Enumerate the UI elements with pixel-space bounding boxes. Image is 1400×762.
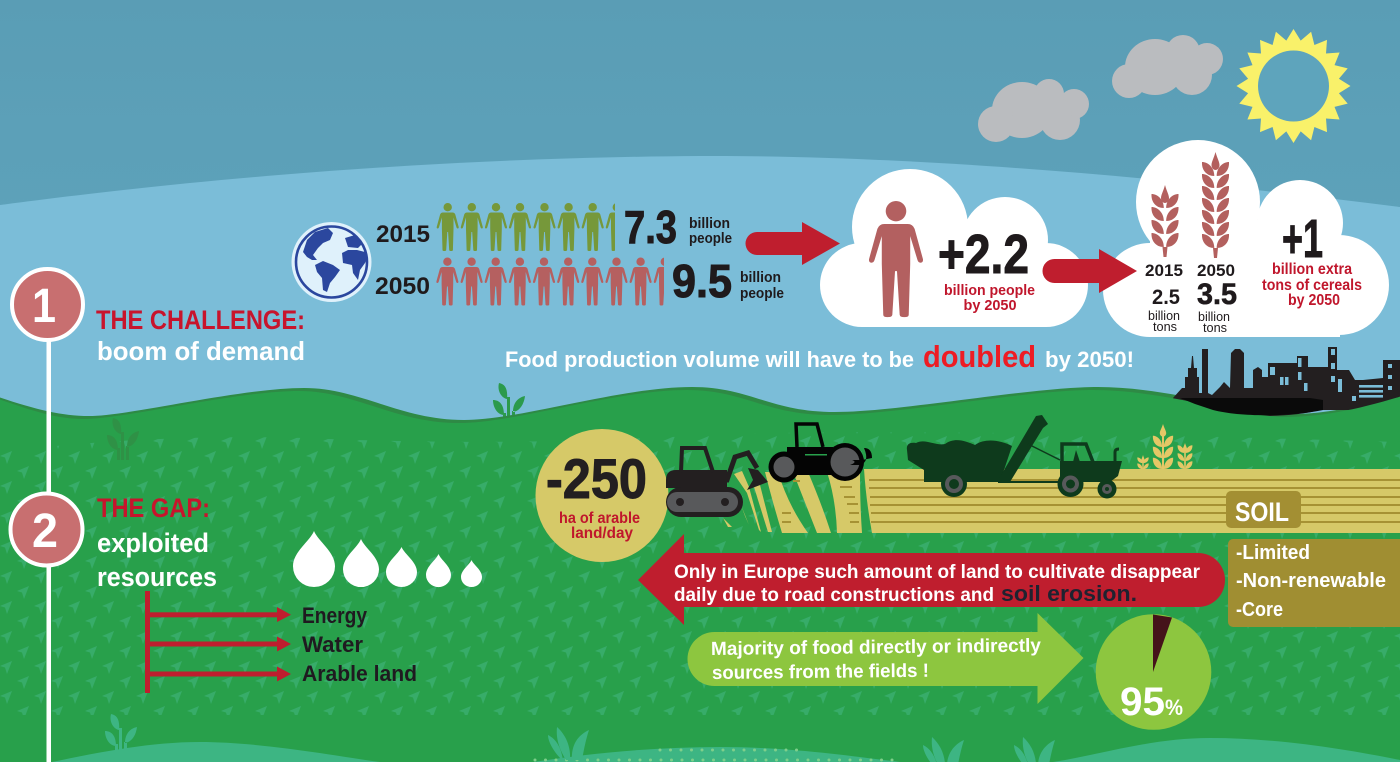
heading: the gap: resources [97,562,217,592]
arrow pattern on field [0,432,1400,715]
stat +1 billion extra tons: tons of cereals [1262,277,1362,294]
icon: large person [869,201,923,317]
icon: wheat 2050 [1202,152,1229,258]
cloud: grey left [978,79,1089,142]
icon: grass 3 [1014,737,1055,762]
icon: water drops [293,531,482,587]
icon: faded sprout [107,418,139,460]
callout: green arrow fields: sources from the fields ! [712,661,929,684]
people row 2015 [437,203,628,251]
pie chart 95% [1096,614,1211,730]
timeline line [46,340,51,762]
arrow: cloud to cereals [1042,249,1137,293]
people row 2050 [436,258,676,306]
resource labels: Energy [302,603,368,628]
cereals 2050 text [1197,261,1237,335]
stat 9.5 billion people [672,255,784,307]
stat +2.2 billion people: billion people [944,282,1035,299]
cereals 2015 text: 2015 [1145,261,1183,280]
stat +2.2 billion people [938,223,1035,314]
field row dashes [782,480,859,523]
cereals 2015 text [1145,261,1183,334]
callout: green arrow fields: Majority of food directly or indirectly [711,636,1041,660]
callout: red arrow europe: daily due to road constructions and [674,584,994,606]
stat +1 billion extra tons: by 2050 [1288,292,1340,309]
icon: grass 2 [923,737,964,762]
cloud: cereals [1103,140,1389,337]
stat 7.3 billion people: billion [689,216,730,232]
arrow: people to cloud [746,222,840,265]
stat +2.2 billion people: +2.2 [938,223,1029,285]
heading: the challenge [96,305,305,366]
city skyline [1173,347,1400,416]
green hill edge [0,385,1400,762]
badge: -250 ha: -250 [546,447,647,510]
label: soil: SOIL [1235,497,1289,527]
icon: sun [1236,29,1350,143]
icon: bottom sprout [105,714,137,756]
callout: red arrow europe [638,534,1225,625]
step 2 badge: 2 [32,505,58,558]
callout: green arrow fields [688,613,1084,704]
icon: sprout on horizon [493,383,525,425]
black ground under city [1180,398,1323,415]
panel: soil properties: -Non-renewable [1236,570,1386,592]
heading: the challenge: boom of demand [97,336,305,366]
heading: the challenge: THE CHALLENGE: [96,305,305,335]
step 2 badge [10,494,82,566]
icon: road roller [768,424,872,482]
dots on bottom hills [535,750,900,760]
cereals 2050 text: tons [1203,320,1227,335]
cereals 2050 text: 2050 [1197,261,1235,280]
cereals 2015 text: tons [1153,319,1177,334]
stat +2.2 billion people: by 2050 [964,297,1016,314]
stat 7.3 billion people: people [689,231,732,247]
field: curved rows [723,471,862,533]
field: straight rows [864,469,1400,533]
icon: globe [292,222,372,302]
badge: -250 ha: land/day [571,525,633,542]
headline: food production: Food production volume will have to be [505,347,914,372]
cereals 2015 text: 2.5 [1152,286,1180,309]
stat 9.5 billion people: billion [740,270,781,286]
year label 2015: 2015 [376,221,430,248]
pie chart 95%: % [1165,695,1183,720]
cereals 2015 text: billion [1148,308,1180,323]
headline: food production [505,339,1134,374]
icon: grain trailer [907,415,1060,497]
stat +1 billion extra tons: billion extra [1272,261,1352,278]
headline: food production: by 2050! [1045,347,1134,372]
stat 9.5 billion people: people [740,286,784,302]
stat +1 billion extra tons [1262,209,1362,309]
step 1 badge [12,269,83,340]
pie chart 95%: 95 [1120,680,1165,724]
heading: the gap: THE GAP: [97,493,210,523]
green hill [0,390,1400,762]
panel: soil properties: -Core [1236,599,1283,621]
icon: wheat 2015 [1151,185,1179,257]
stat +1 billion extra tons: +1 [1282,209,1323,269]
resource labels [302,603,417,686]
headline: food production: doubled [923,339,1036,374]
panel: soil properties: -Limited [1236,542,1310,564]
sky background [0,0,1400,420]
icon: grass 1 [548,727,589,760]
stat 7.3 billion people [624,201,732,253]
resource arrows [145,591,291,693]
icon: bulldozer [666,448,768,517]
cloud: grey right [1112,35,1223,98]
light blue band [0,156,1400,430]
bottom hills [52,738,1400,762]
callout: red arrow europe: soil erosion. [1001,581,1137,606]
year label 2050: 2050 [375,273,430,300]
stat 9.5 billion people: 9.5 [672,255,732,307]
cereals 2050 text: billion [1198,309,1230,324]
badge: -250 ha: ha of arable [559,510,640,527]
cloud: person [820,169,1088,327]
step 1 badge: 1 [32,280,56,333]
badge: -250 ha [536,429,668,562]
resource labels: Water [302,632,363,657]
panel: soil properties [1228,539,1400,627]
heading: the gap: exploited [97,528,209,558]
cereals 2050 text: 3.5 [1197,278,1237,311]
resource labels: Arable land [302,661,417,686]
stat 7.3 billion people: 7.3 [624,201,677,253]
icon: tractor [1058,444,1122,498]
icon: decorative wheat [1137,424,1192,469]
callout: red arrow europe: Only in Europe such amount of land to cultivate disappear [674,561,1200,583]
heading: the gap [97,493,217,592]
label: soil [1226,491,1301,528]
